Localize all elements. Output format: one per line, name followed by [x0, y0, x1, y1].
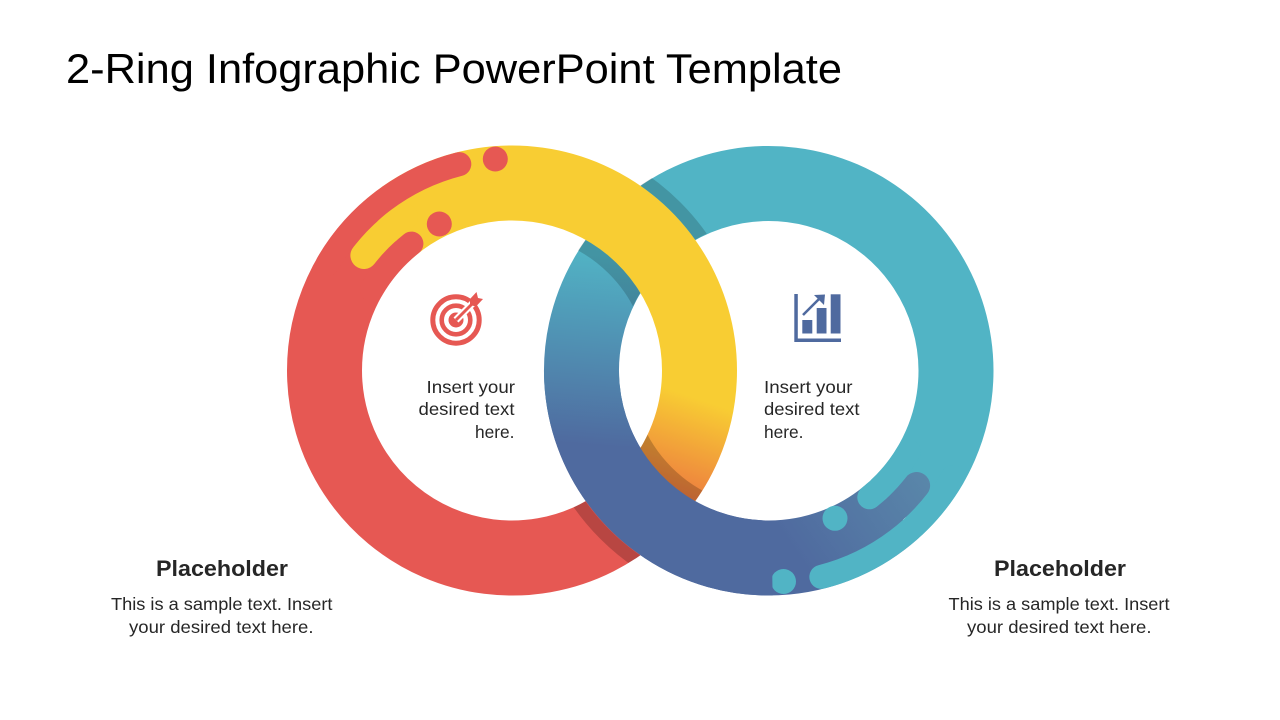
right ring text — [764, 377, 860, 442]
right ring text: Insert your — [764, 377, 853, 397]
yellow tongue — [364, 217, 404, 256]
right caption body — [948, 594, 1170, 637]
left ring yellow arc — [386, 183, 700, 507]
shadow on right ring from left ring — [578, 178, 707, 306]
left caption heading: Placeholder — [156, 556, 288, 581]
icon: bar chart — [794, 294, 841, 342]
right caption body: This is a sample text. Insert — [948, 594, 1170, 614]
right ring text: desired text — [764, 399, 860, 419]
left ring text: desired text — [418, 399, 515, 419]
left caption body: your desired text here. — [129, 617, 314, 637]
left ring text: here. — [475, 422, 514, 442]
right ring — [581, 183, 956, 594]
left ring dots — [427, 146, 508, 236]
icon: target — [433, 292, 483, 343]
left ring red bands — [328, 164, 459, 290]
left caption body — [111, 594, 333, 637]
left ring red base — [324, 229, 640, 558]
left ring text: Insert your — [426, 377, 515, 397]
right caption heading: Placeholder — [994, 556, 1126, 581]
right ring text: here. — [764, 422, 804, 442]
left ring — [324, 146, 700, 558]
right ring bottom crossing overlay — [544, 370, 772, 596]
right ring dots — [771, 506, 848, 594]
right caption body: your desired text here. — [967, 617, 1152, 637]
left ring text — [418, 377, 515, 442]
right ring teal bands — [821, 452, 953, 577]
left caption — [111, 556, 333, 637]
shadow on left ring from right ring — [574, 435, 702, 563]
left caption body: This is a sample text. Insert — [111, 594, 333, 614]
right ring base — [640, 183, 956, 508]
right caption — [948, 556, 1170, 637]
title: 2-Ring Infographic PowerPoint Template — [66, 45, 842, 92]
right ring blue arc — [581, 234, 917, 558]
